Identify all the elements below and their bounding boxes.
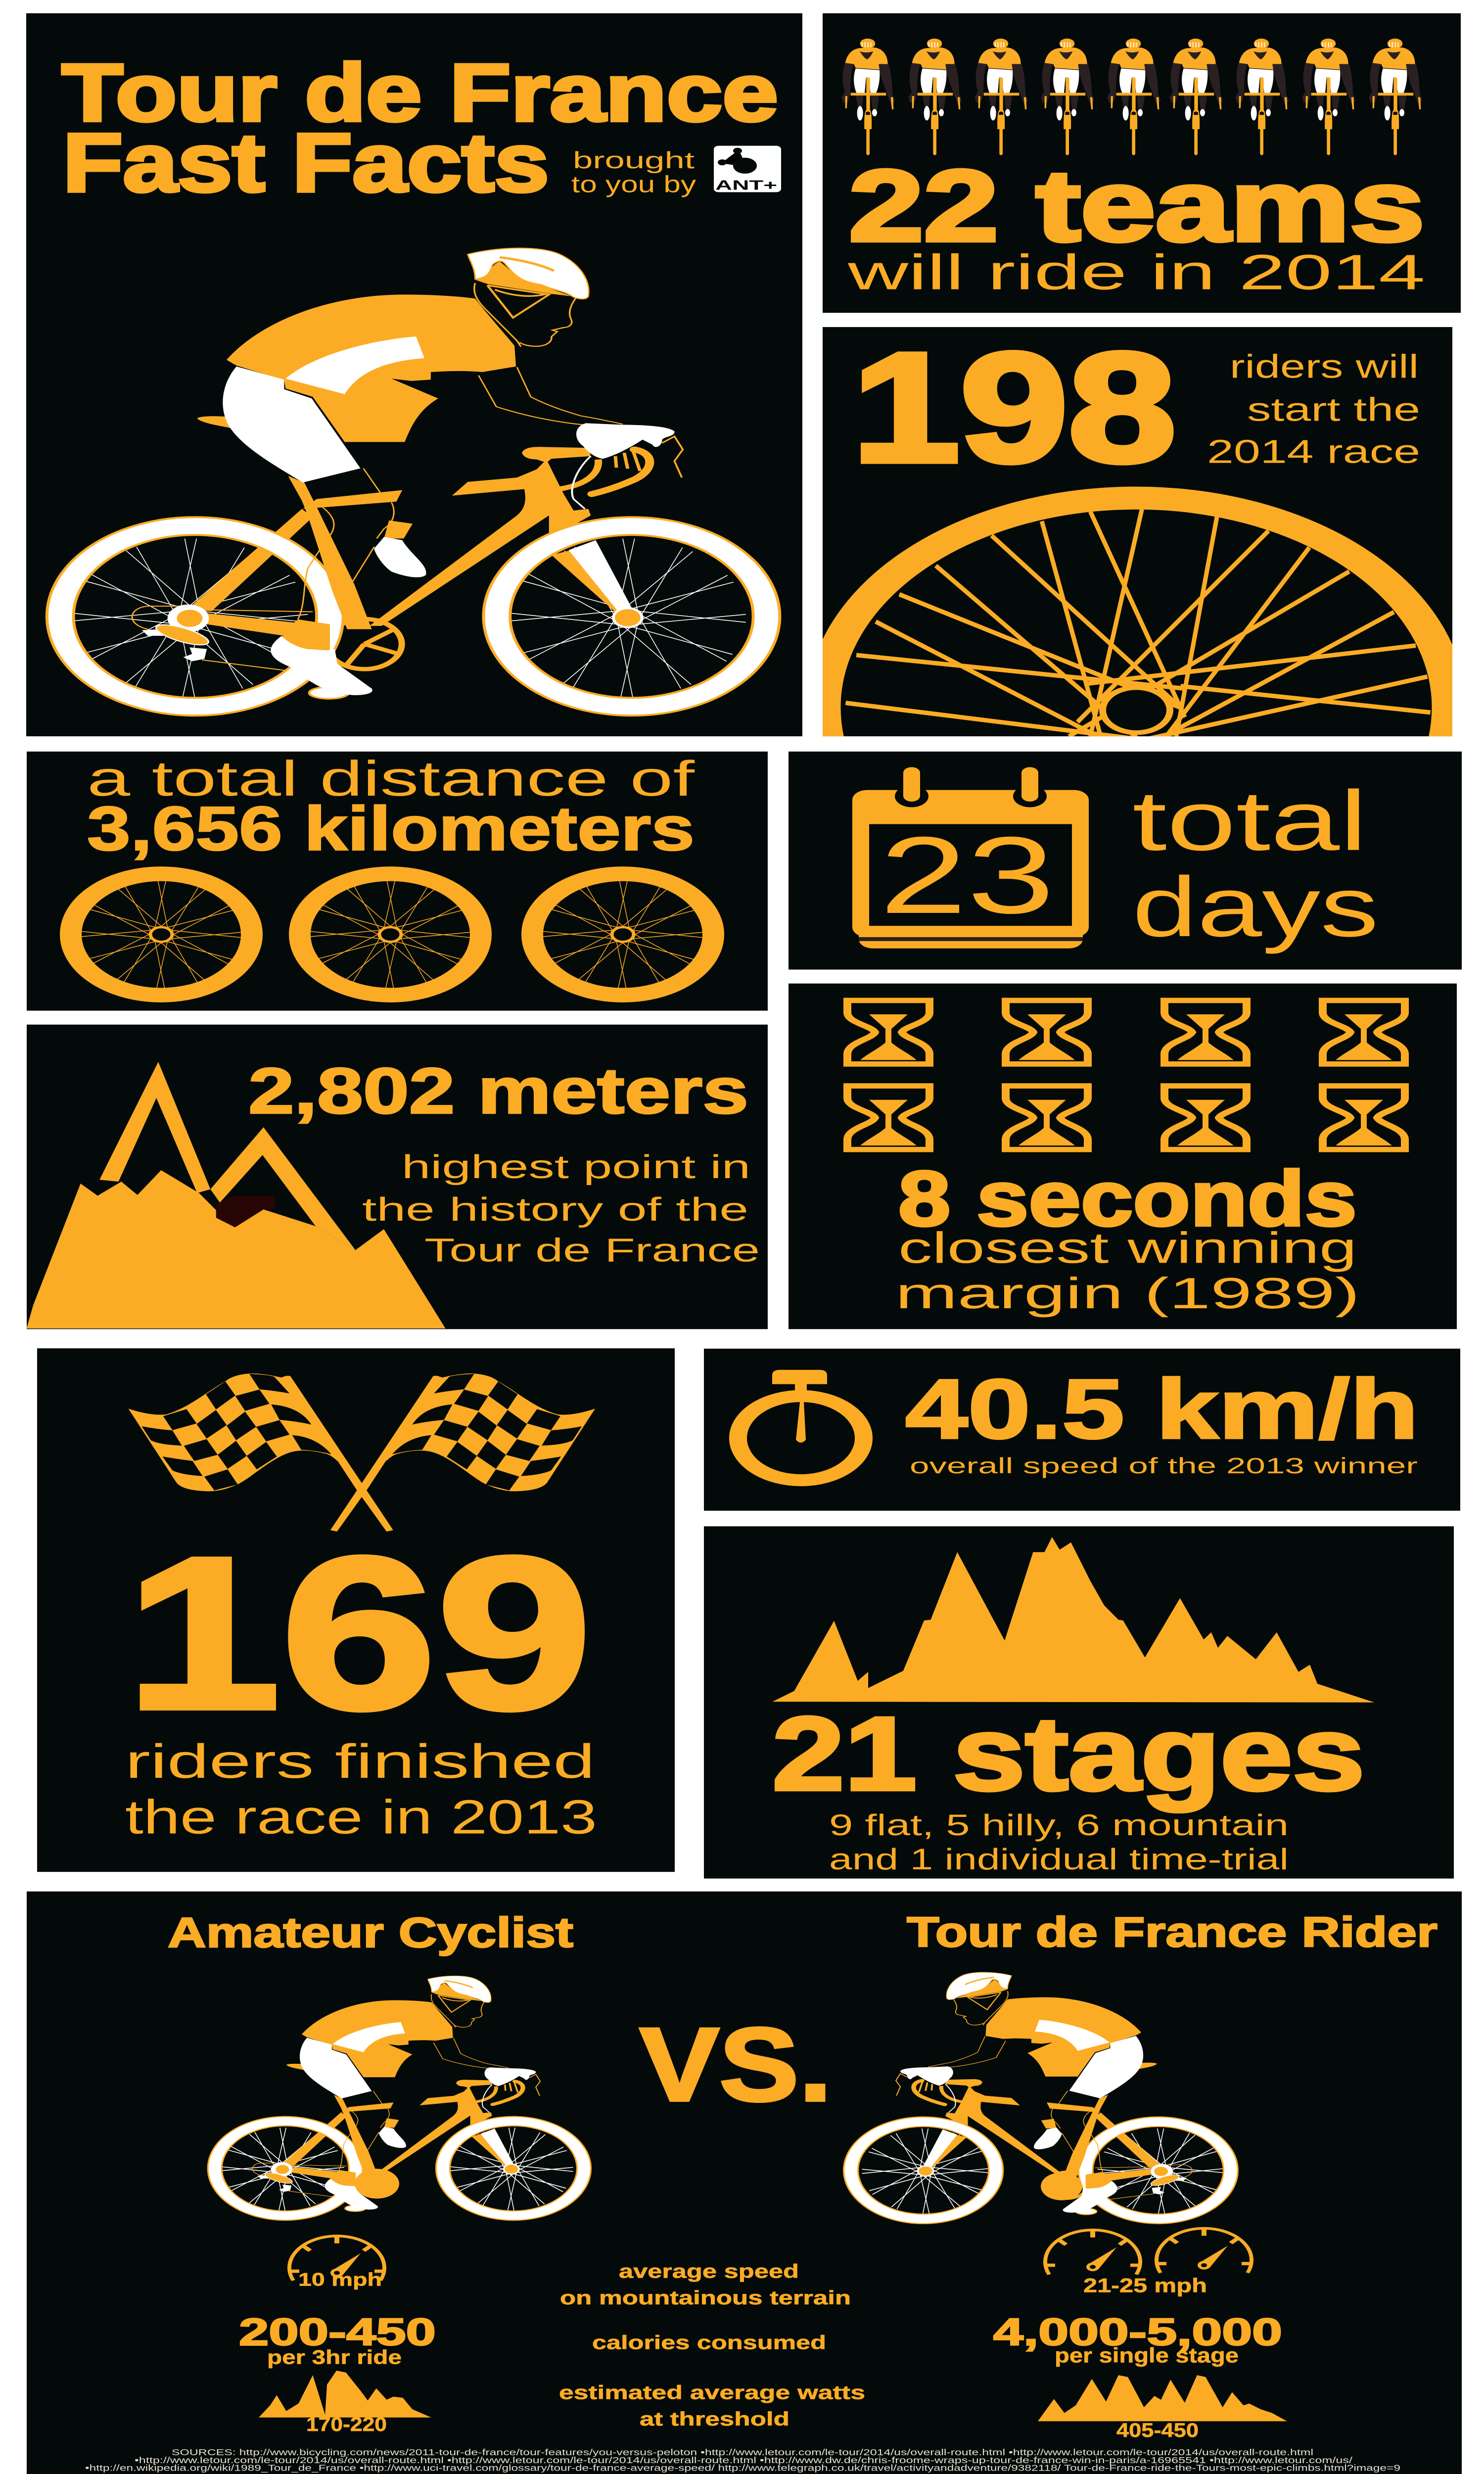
sources: •http://www.letour.com/le-tour/2014/us/overall-route.html •http://www.letour.com/le-tour/2014/us/overall-route.html •http://www.dw.de/chris-froome-wraps-up-tour-de-france-win-in-paris/a-16965541 •http://www.letour.com/us/ (135, 2455, 1353, 2465)
label: calories consumed: calories consumed (592, 2332, 826, 2353)
amateur calories: 200-450 (239, 2310, 436, 2353)
pro calories: 4,000-5,000 (993, 2310, 1282, 2353)
40.5 km/h: 40.5 km/h (905, 1362, 1419, 1456)
170-220: 170-220 (306, 2413, 387, 2435)
a total distance of: a total distance of (87, 751, 695, 807)
icon: amateur watts profile (259, 2371, 431, 2418)
VS.: VS. (640, 2006, 832, 2123)
riders finished the race in 2013 (125, 1735, 597, 1844)
panel: highest point (27, 1025, 768, 1329)
riders will start the 2014 race: 2014 race (1207, 433, 1420, 471)
icon: amateur chainring (355, 2169, 399, 2198)
riders finished the race in 2013: the race in 2013 (125, 1790, 597, 1844)
highest point description (362, 1148, 760, 1269)
icon: ANT+ logo (714, 146, 781, 193)
panel: 21 stages (704, 1526, 1454, 1879)
highest point description: the history of the (362, 1191, 748, 1228)
heading: Amateur Cyclist: Amateur Cyclist (168, 1909, 573, 1956)
sources: SOURCES: http://www.bicycling.com/news/2011-tour-de-france/tour-features/you-versus-peloton •http://www.letour.com/le-tour/2014/us/overall-route.html •http://www.letour.com/le-tour/2014/us/overall-route.html (172, 2447, 1313, 2457)
198 number: 198 (852, 320, 1176, 494)
10 mph: 10 mph (298, 2270, 382, 2290)
2,802 meters: 2,802 meters (248, 1055, 748, 1127)
days: days (1132, 860, 1379, 954)
label: average speed: average speed (619, 2261, 799, 2282)
icon: main cyclist (60, 248, 767, 707)
icon: ANT+ logo: ANT+ (715, 178, 777, 193)
icon: crossed checkered flags (128, 1374, 595, 1531)
panel: 169 finishers (37, 1348, 675, 1872)
icon: pro speedometers (1045, 2229, 1252, 2275)
closest winning margin (895, 1223, 1360, 1318)
will ride in 2014: will ride in 2014 (847, 244, 1425, 300)
panel: overall speed (704, 1349, 1460, 1511)
icon: pro chainring (1041, 2173, 1082, 2200)
panel: 22 teams (823, 13, 1461, 313)
icon: row of front-view riders (841, 39, 1423, 155)
closest winning margin: margin (1989) (895, 1269, 1360, 1318)
label: estimated average watts: estimated average watts (559, 2382, 865, 2403)
icon: eight hourglasses (847, 1000, 1405, 1149)
label: estimated average watts: at threshold (640, 2409, 789, 2430)
icon: calendar (852, 767, 1089, 949)
title: Tour de France (62, 48, 778, 138)
total: total (1132, 774, 1367, 868)
icon: stopwatch (738, 1370, 864, 1480)
label: average speed: on mountainous terrain (560, 2287, 851, 2309)
riders will start the 2014 race: start the (1247, 391, 1420, 428)
brought to you by: to you by (571, 171, 696, 197)
riders will start the 2014 race: riders will (1230, 348, 1419, 385)
405-450: 405-450 (1116, 2419, 1199, 2441)
calendar number: 23 (880, 814, 1055, 936)
closest winning margin: closest winning (898, 1223, 1357, 1272)
riders will start the 2014 race (1207, 348, 1420, 471)
brought to you by: brought (573, 147, 695, 173)
panel: amateur versus pro (27, 1892, 1462, 2474)
sources: •http://en.wikipedia.org/wiki/1989_Tour_de_France •http://www.uci-travel.com/glossary/tour-de-france-average-speed/ http://www.telegraph.co.uk/travel/activityandadventure/9382118/ Tour-de-France-ride-the-Tours-most-epic-climbs.html?image=9 (85, 2463, 1400, 2473)
icon: pro cyclist mirrored (851, 1972, 1231, 2219)
icon: large wheel (823, 487, 1452, 736)
brought to you by (571, 147, 696, 197)
8 seconds: 8 seconds (898, 1155, 1357, 1242)
panel: 198 riders (823, 327, 1452, 736)
169 number: 169 (125, 1512, 592, 1755)
riders finished the race in 2013: riders finished (125, 1735, 595, 1788)
highest point description: Tour de France (424, 1232, 760, 1269)
label: average speed (560, 2261, 851, 2309)
22 teams heading: 22 teams (849, 149, 1425, 262)
icon: pro watts profile (1038, 2375, 1287, 2421)
panel: 23 total days (788, 752, 1462, 970)
amateur calories: per 3hr ride (267, 2346, 402, 2368)
icon: mountain (27, 1062, 446, 1329)
highest point description: highest point in (402, 1148, 750, 1186)
stage breakdown: 9 flat, 5 hilly, 6 mountain (829, 1808, 1289, 1842)
icon: amateur speedometer (289, 2236, 384, 2281)
21-25 mph: 21-25 mph (1083, 2274, 1207, 2296)
label: estimated average watts (559, 2382, 865, 2430)
stage breakdown: and 1 individual time-trial (829, 1843, 1289, 1876)
pro calories: per single stage (1055, 2344, 1239, 2367)
title: Fast Facts (63, 116, 549, 209)
panel: title and main cyclist (26, 13, 802, 736)
overall speed caption: overall speed of the 2013 winner (910, 1453, 1418, 1478)
icon: three wheels (71, 874, 713, 995)
3,656 kilometers: 3,656 kilometers (87, 794, 695, 863)
panel: closest margin (788, 984, 1457, 1329)
21 stages: 21 stages (772, 1695, 1365, 1812)
sources (85, 2447, 1400, 2473)
icon: amateur cyclist (215, 1976, 584, 2216)
icon: stage elevation profile (773, 1537, 1374, 1703)
panel: total distance (27, 751, 768, 1011)
stage breakdown (829, 1808, 1289, 1876)
title (62, 48, 778, 209)
